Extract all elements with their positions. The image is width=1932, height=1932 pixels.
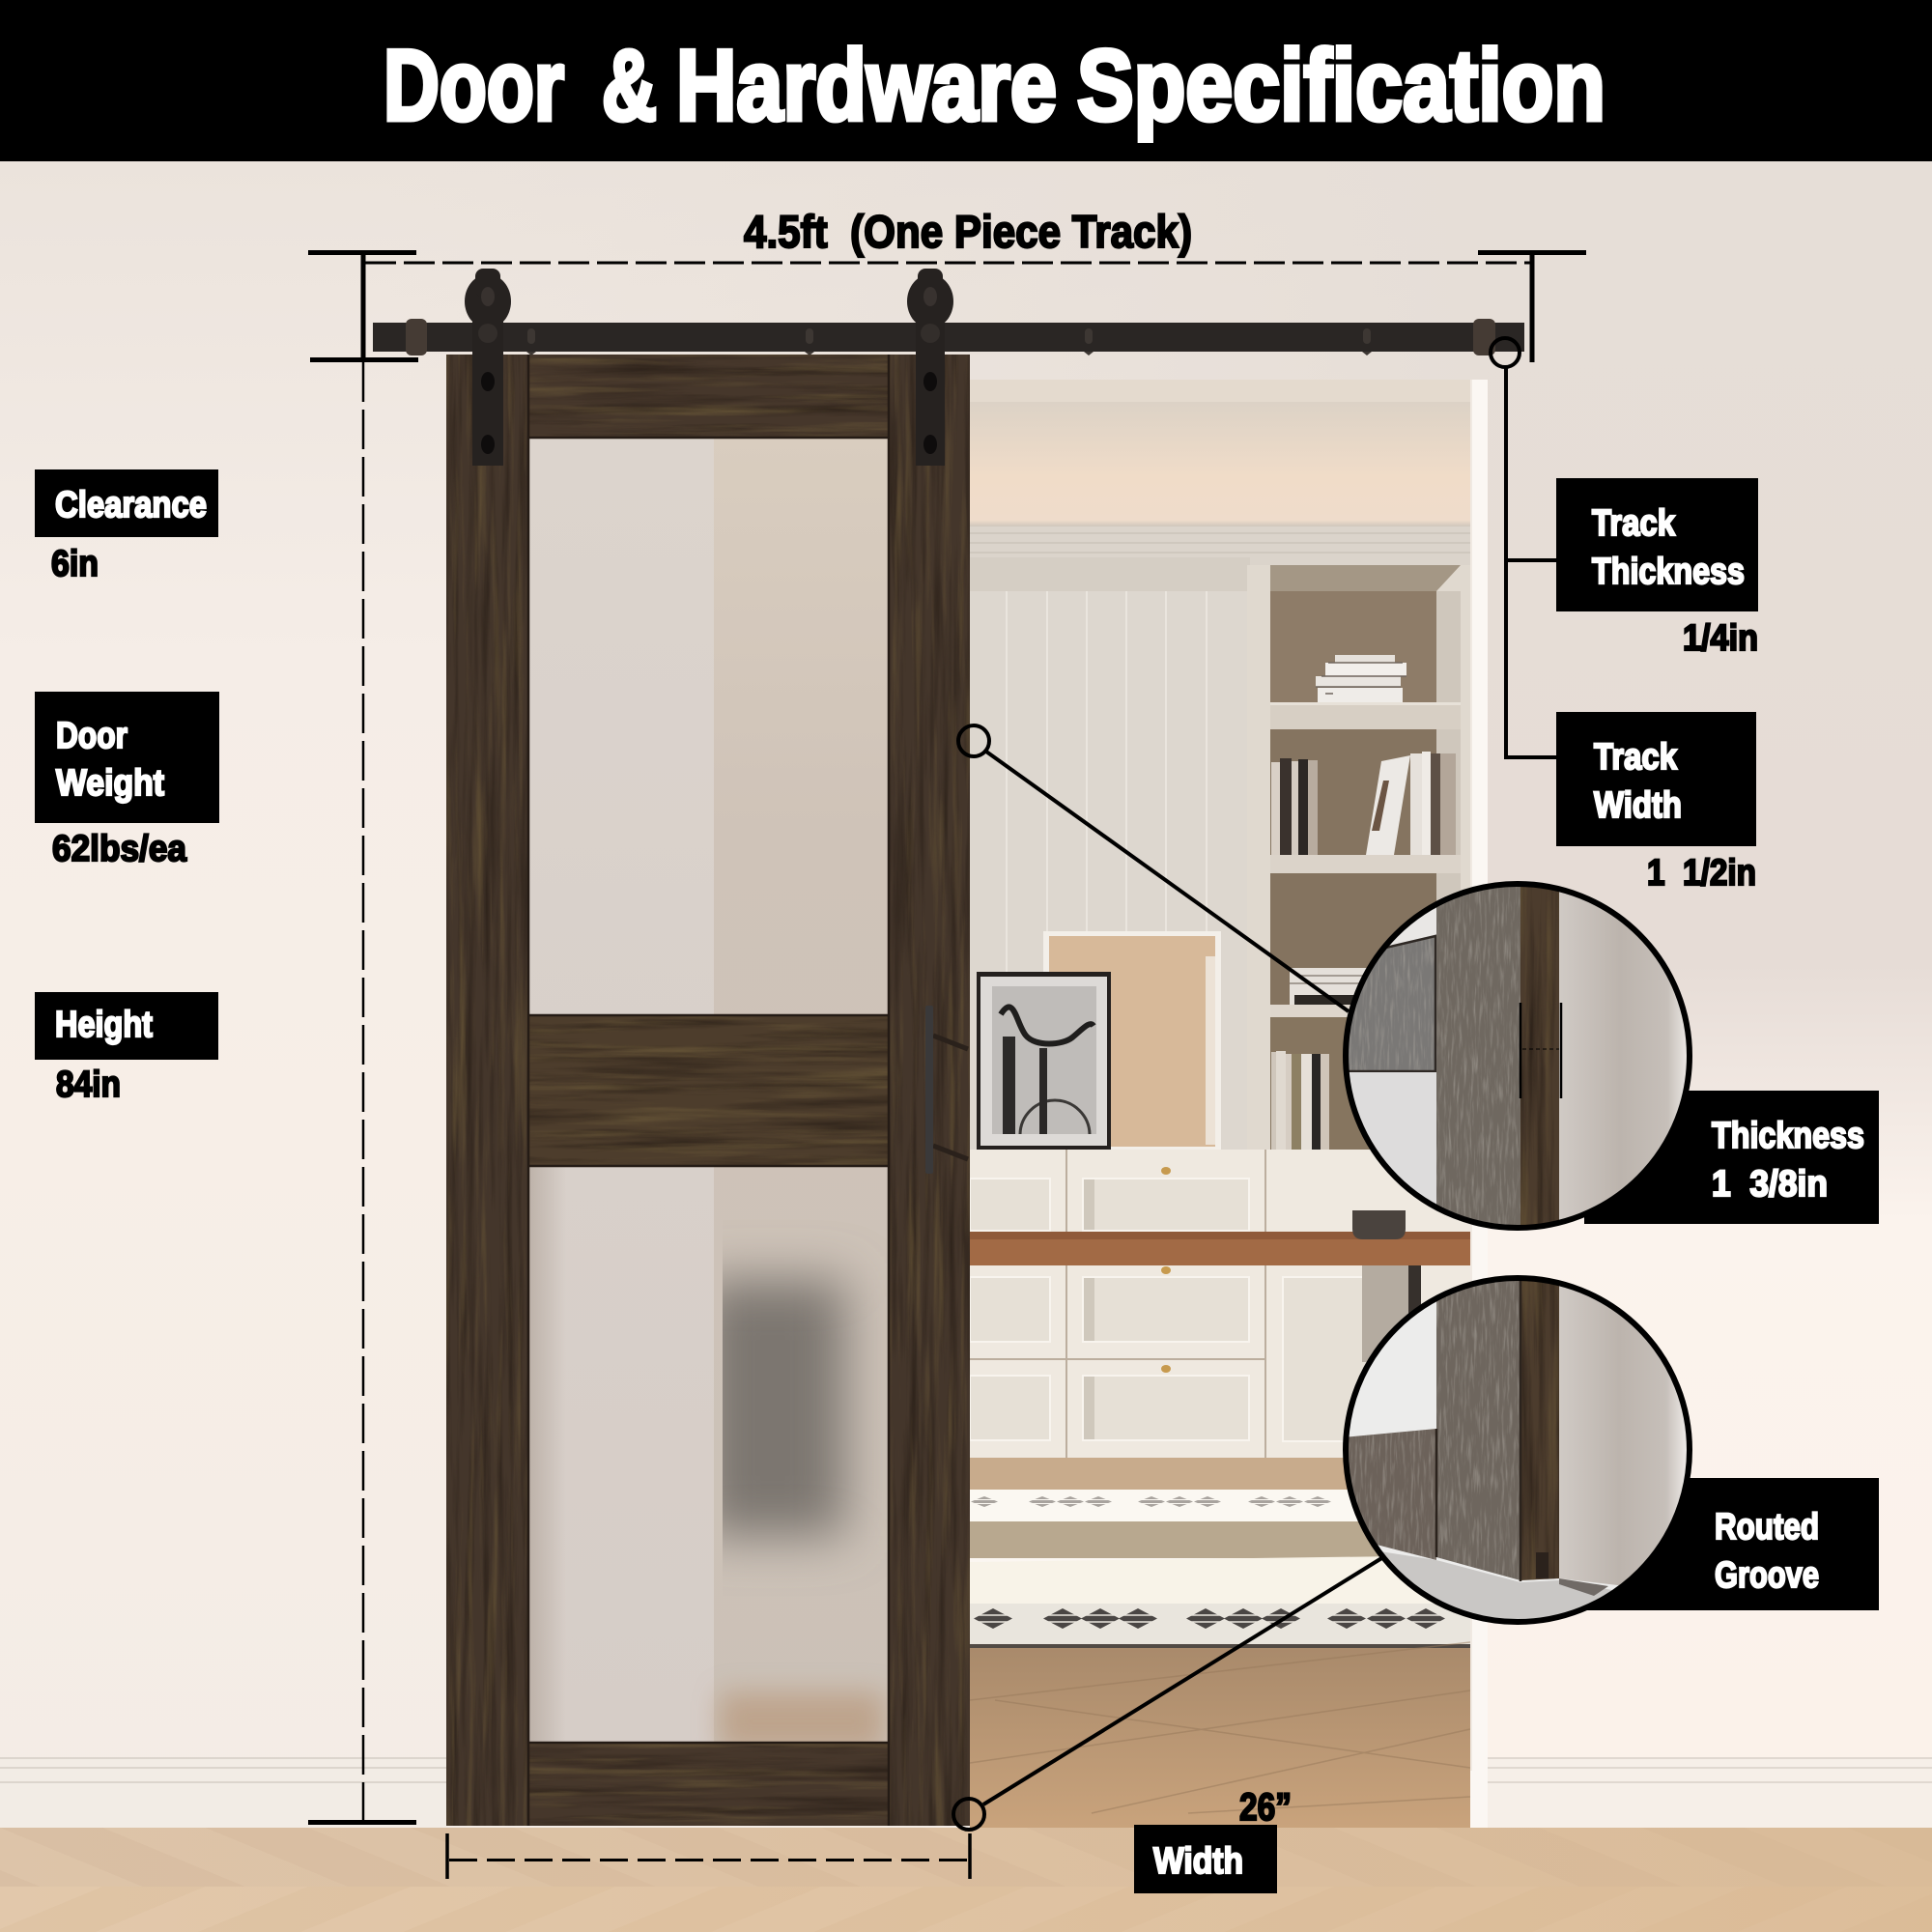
- label: routed groove: [1584, 1478, 1879, 1610]
- width dimension line: [447, 1833, 970, 1879]
- track length label: 4.5ft (One Piece Track): [744, 206, 1192, 257]
- height dimension line: [308, 362, 416, 1822]
- door handle: [925, 1006, 968, 1174]
- label: height: 84in: [56, 1065, 121, 1105]
- title: Door: [384, 30, 564, 142]
- routed groove leader line: [953, 1557, 1383, 1830]
- baseboard and outer floor: [0, 1758, 1932, 1932]
- label: clearance: [35, 469, 218, 584]
- label: track width: [1556, 712, 1756, 894]
- label: track thickness: Track: [1592, 503, 1676, 544]
- label: track thickness: 1/4in: [1683, 618, 1758, 659]
- magnifier: door thickness detail: [1343, 881, 1694, 1232]
- label: track width: Width: [1594, 785, 1682, 826]
- left hanger: [465, 269, 511, 466]
- framed art: bicycle: [977, 972, 1111, 1150]
- label: track thickness: Thickness: [1592, 552, 1745, 592]
- label: routed groove: Routed: [1715, 1507, 1819, 1548]
- label: height: [35, 992, 218, 1105]
- label: door weight: 62lbs/ea: [52, 829, 187, 869]
- label: track width: Track: [1594, 737, 1678, 778]
- track length dimension: [308, 206, 1586, 362]
- title: [384, 30, 1605, 142]
- magnifier: routed groove detail: [1343, 1275, 1692, 1625]
- title: Specification: [1077, 30, 1605, 142]
- label: width: Width: [1153, 1841, 1243, 1882]
- room seen through the opening: [970, 380, 1488, 1828]
- inner floor and rug: [970, 1458, 1470, 1828]
- cabinet and drawers: [970, 1150, 1470, 1462]
- thickness leader line: [958, 725, 1349, 1011]
- label: door weight: Weight: [56, 763, 164, 804]
- label: door weight: Door: [56, 716, 128, 756]
- track rail: [373, 323, 1524, 352]
- right hanger: [907, 269, 953, 466]
- barn door track hardware: [373, 269, 1524, 466]
- header bar with title: [0, 0, 1932, 161]
- title: &: [602, 30, 657, 142]
- door stiles and rails: [446, 355, 528, 1826]
- desk top: [970, 1210, 1470, 1265]
- books: [1271, 655, 1456, 1150]
- title: Hardware: [676, 30, 1057, 142]
- label: thickness: [1584, 1091, 1879, 1224]
- track callout leader: [1491, 338, 1556, 757]
- label: routed groove: Groove: [1715, 1555, 1819, 1596]
- label: clearance: 6in: [51, 544, 99, 584]
- label: width: 26”: [1239, 1786, 1292, 1829]
- crown moulding: [970, 526, 1470, 565]
- track bolts: [526, 328, 1372, 355]
- label: clearance: Clearance: [55, 485, 207, 526]
- door frame trim: [1470, 380, 1488, 1828]
- bookcase: [1247, 565, 1470, 1164]
- label: thickness: 1 3/8in: [1712, 1164, 1828, 1205]
- panelled wall: [970, 557, 1250, 1166]
- label: width: [1134, 1786, 1292, 1893]
- frosted glass panels: [529, 438, 889, 1750]
- label: track width: 1 1/2in: [1647, 853, 1756, 894]
- barn door: [446, 355, 970, 1826]
- label: track thickness: [1556, 478, 1758, 659]
- framed art: abstract: [1043, 931, 1221, 1150]
- label: height: Height: [55, 1005, 153, 1045]
- track stops: [406, 319, 427, 355]
- label: door weight: [35, 692, 219, 869]
- label: thickness: Thickness: [1712, 1116, 1864, 1156]
